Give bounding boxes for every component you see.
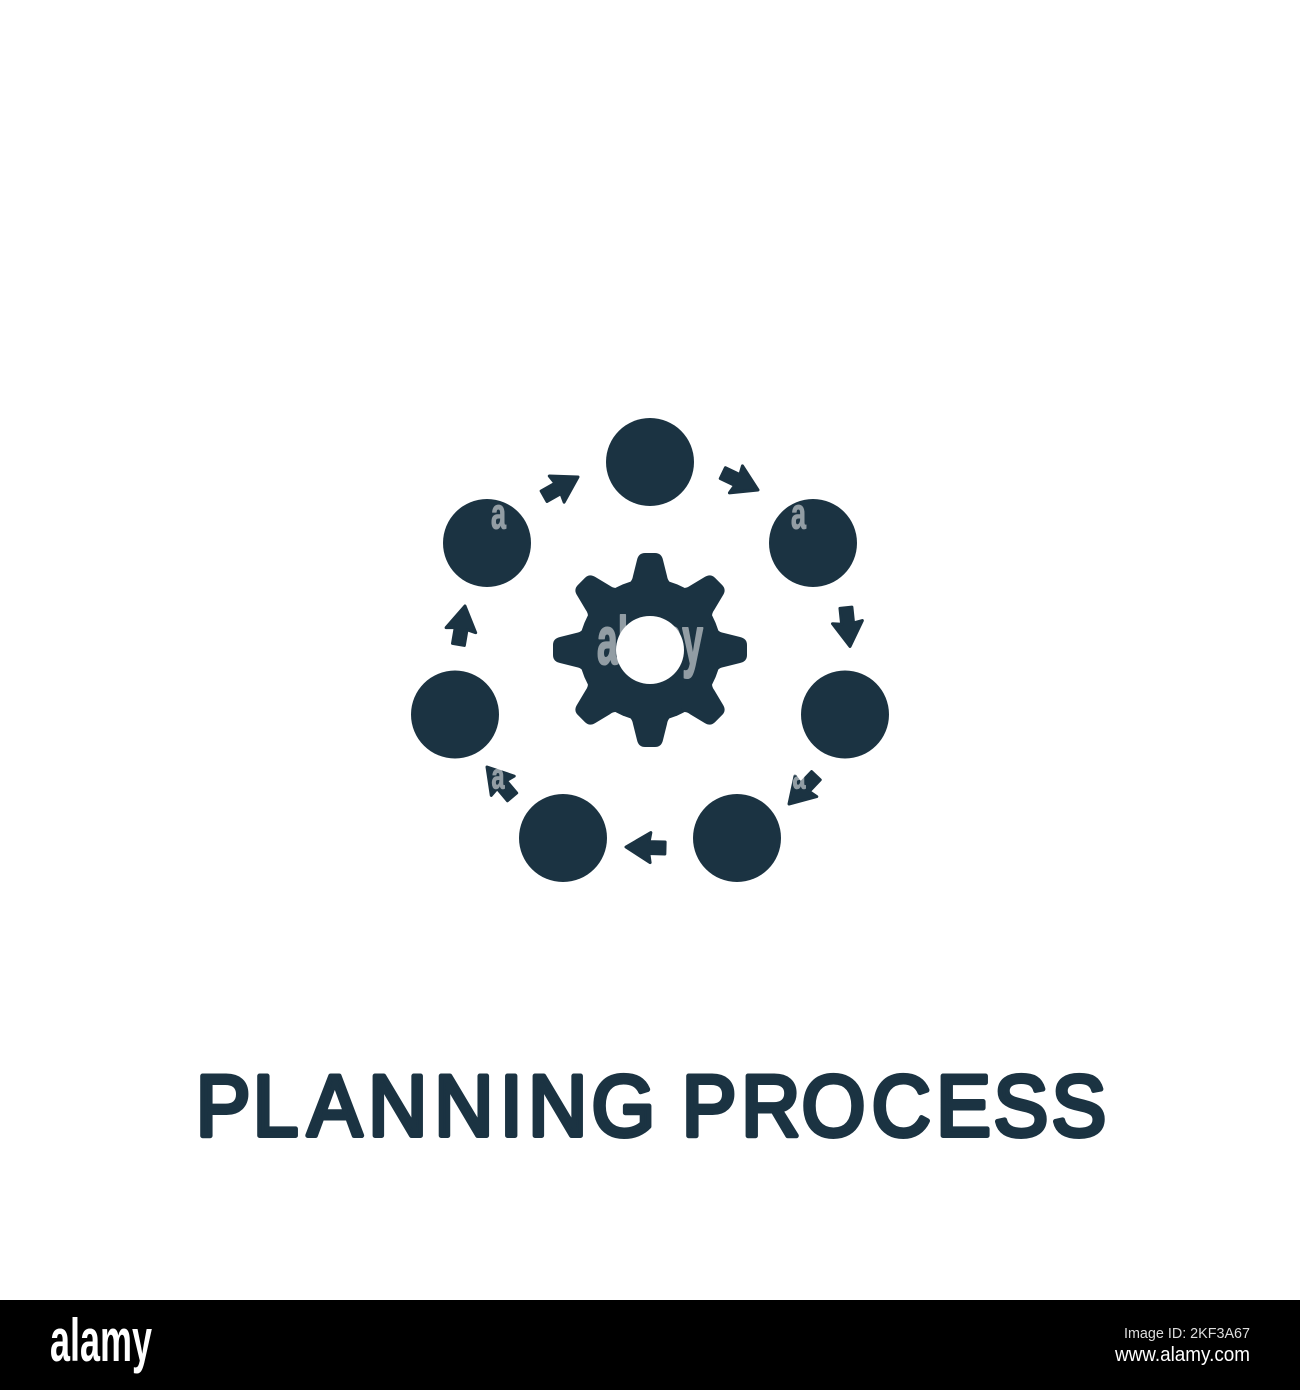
watermark: alamy marks over the icon: a — [492, 756, 505, 796]
watermark: alamy marks over the icon: a — [792, 756, 806, 796]
watermark: alamy marks over the icon: a — [791, 490, 806, 538]
icon: gear centre hole — [616, 616, 684, 684]
footer logo: alamy — [50, 1307, 152, 1374]
arrows: clockwise flow between steps — [444, 460, 865, 863]
icon: process step circles — [411, 418, 889, 882]
watermark: alamy marks over the icon: alamy — [597, 603, 703, 679]
watermark: alamy marks over the icon: a — [491, 490, 506, 538]
footer bar — [0, 1300, 1300, 1390]
website: www.alamy.com — [1114, 1344, 1250, 1366]
watermark: alamy marks over the icon — [491, 490, 806, 796]
icon: planning process cycle — [411, 418, 889, 882]
icon: central gear — [553, 553, 747, 747]
image id: Image ID: 2KF3A67 — [1124, 1325, 1250, 1342]
title: PLANNING PROCESS — [196, 1058, 1106, 1154]
